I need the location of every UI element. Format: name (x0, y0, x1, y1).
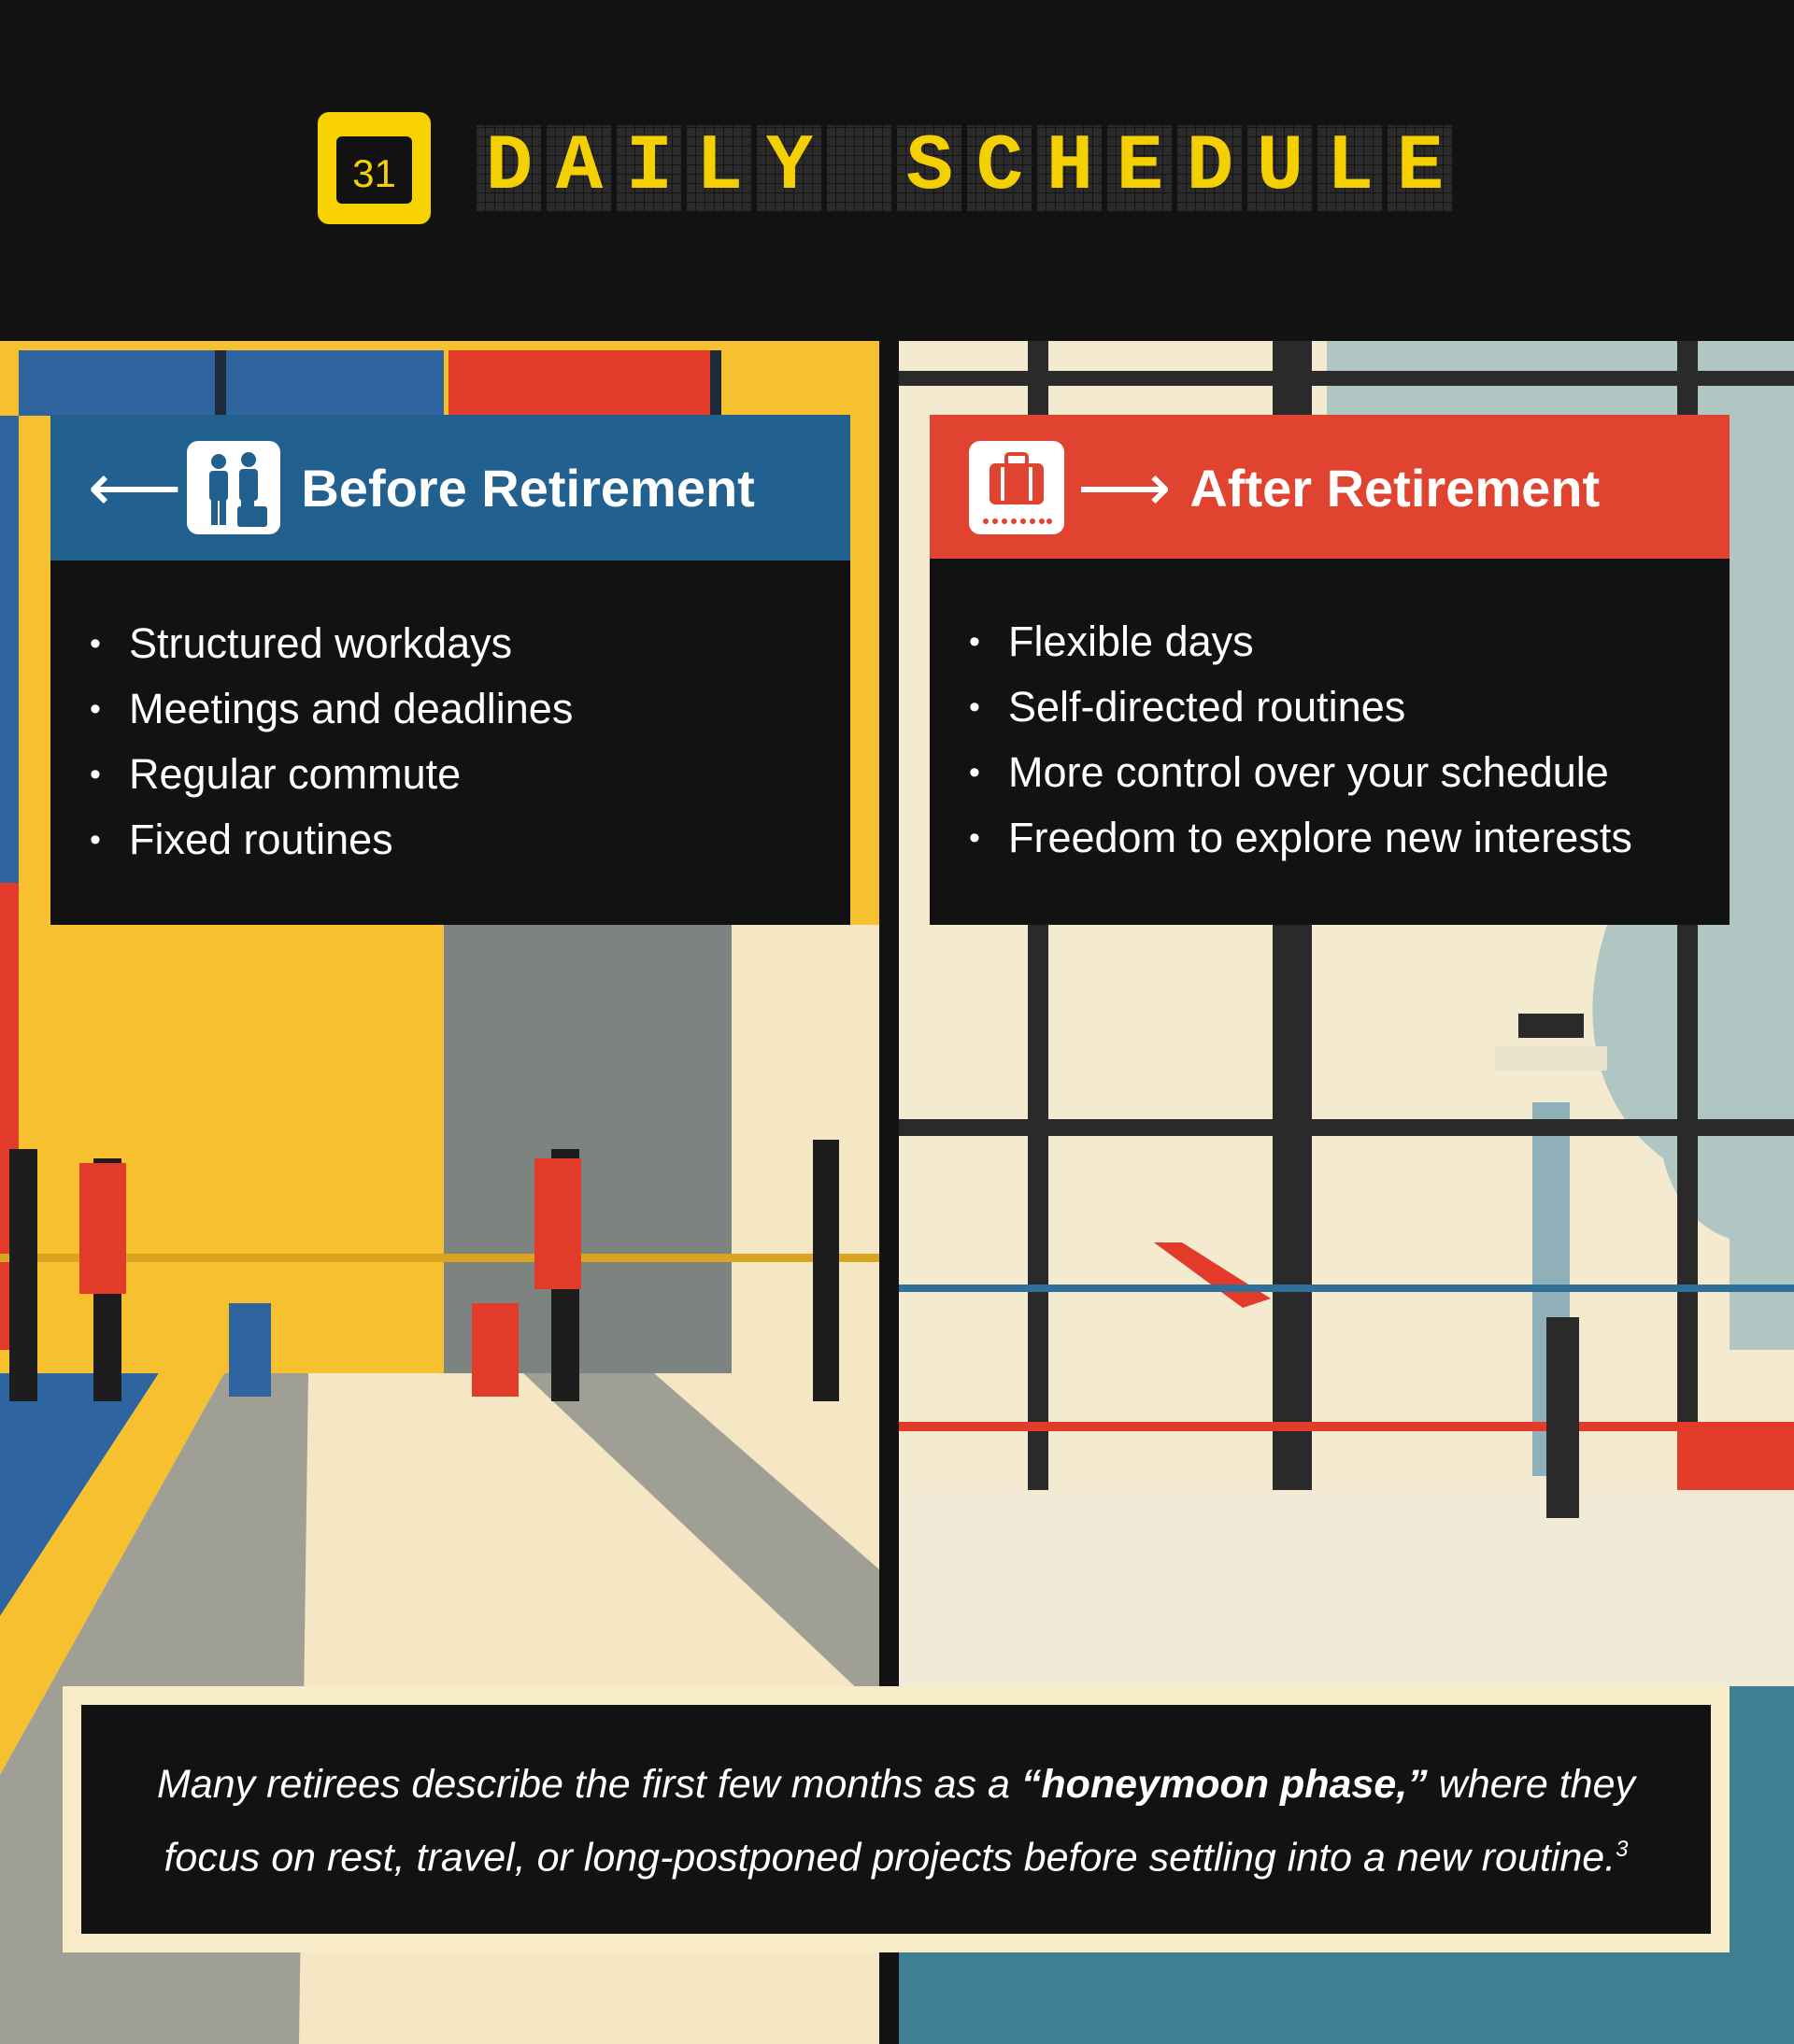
title text: E (1117, 123, 1163, 212)
list: after: More control over your schedule (1008, 748, 1609, 796)
title text: Y (766, 123, 813, 212)
title (318, 112, 1452, 224)
title text: H (1046, 123, 1093, 212)
list: before: Meetings and deadlines (129, 685, 573, 732)
title text: U (1257, 123, 1303, 212)
title text: I (626, 123, 673, 212)
callout (63, 1686, 1730, 1952)
list: after: Self-directed routines (1008, 683, 1405, 731)
list: after: Freedom to explore new interests (1008, 814, 1632, 861)
list: before (50, 561, 850, 925)
heading: before: ⟵ (88, 451, 181, 524)
title text: A (556, 123, 603, 212)
title text: L (696, 123, 743, 212)
heading: after: ⟶ (1077, 451, 1171, 524)
title text: L (1327, 123, 1374, 212)
icon: calendar: 31 (352, 151, 396, 195)
list: after: Flexible days (1008, 617, 1254, 665)
list: after (930, 559, 1730, 925)
icon: calendar (318, 112, 431, 224)
list: before: Structured workdays (129, 619, 512, 667)
list: before: Fixed routines (129, 816, 393, 863)
icon: people (187, 441, 280, 534)
title text: E (1397, 123, 1444, 212)
title text: S (906, 123, 953, 212)
callout: Many retirees describe the first few months as a “honeymoon phase,” where they (157, 1762, 1635, 1807)
panel: after retirement (930, 415, 1730, 925)
title text: D (1187, 123, 1233, 212)
heading: before (50, 415, 850, 561)
list: before: Regular commute (129, 750, 461, 798)
heading: after: After Retirement (1189, 458, 1600, 518)
icon: luggage (969, 441, 1064, 534)
callout: focus on rest, travel, or long-postponed projects before settling into a new routine.3 (164, 1835, 1629, 1880)
title text: C (976, 123, 1023, 212)
title text: D (486, 123, 533, 212)
panel: before retirement (50, 415, 850, 925)
title text (477, 123, 1452, 212)
heading: after (930, 415, 1730, 561)
heading: before: Before Retirement (301, 458, 755, 518)
